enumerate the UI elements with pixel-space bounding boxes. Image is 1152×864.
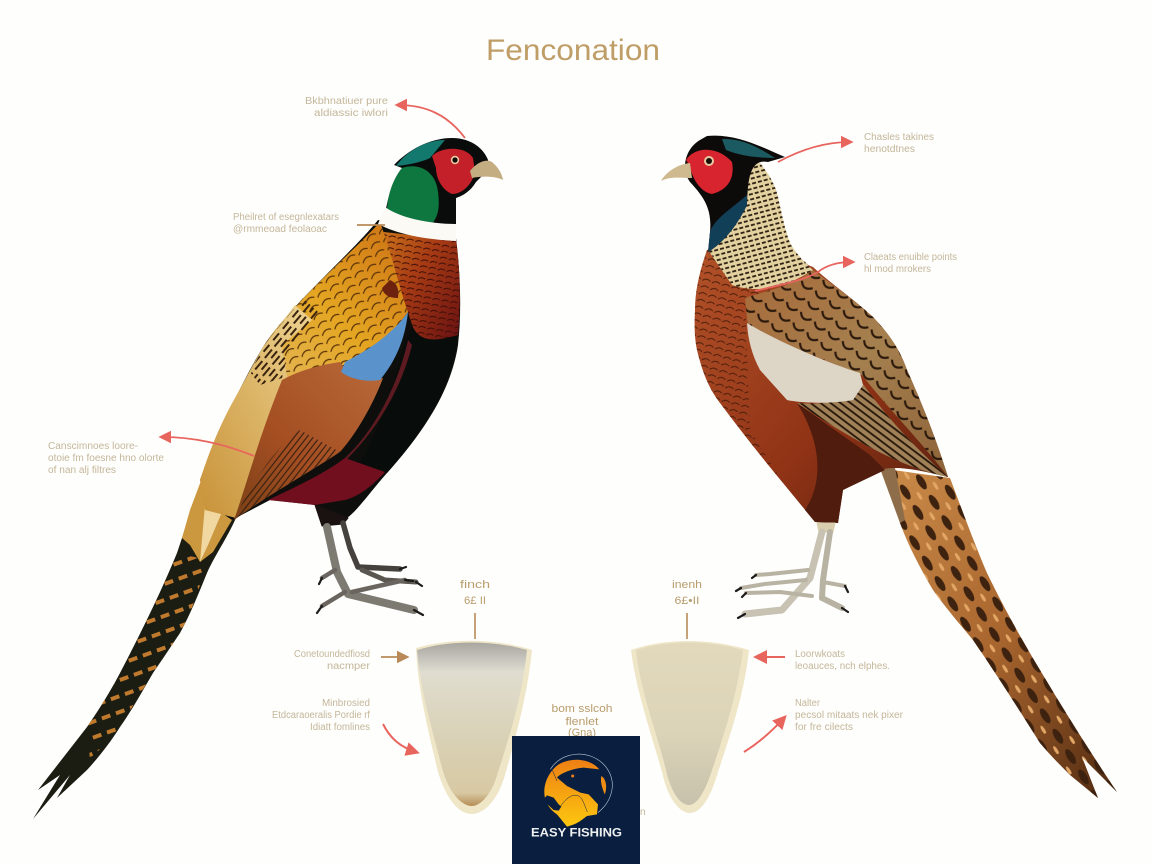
callout: lower left upper	[294, 649, 406, 672]
arrow: crown pointer	[398, 105, 465, 138]
callout: right top: henotdtnes	[864, 144, 915, 155]
callout: left wing: Canscimnoes loore-	[48, 441, 138, 452]
dark red belly	[268, 458, 385, 505]
arrow: red curved pointer	[744, 718, 784, 752]
callout: lower left lower: Etdcaraoeralis Pordie rf	[272, 710, 370, 721]
female white patch	[747, 323, 863, 403]
female lower wing stripes	[797, 380, 948, 477]
callout: left collar: Pheilret of esegnlexatars	[233, 212, 339, 223]
male red face	[432, 149, 475, 194]
female tail	[878, 463, 1117, 798]
arrow: wing pointer	[162, 437, 254, 456]
callout: right neck: hl mod mrokers	[864, 264, 931, 275]
callout: left top	[305, 96, 465, 138]
diagram: left tongue specimen	[416, 641, 532, 814]
logo: Easy Fishing	[512, 736, 640, 864]
label: left scale: 6£ II	[464, 595, 486, 607]
male tail	[33, 467, 240, 819]
callout: right top	[778, 132, 934, 162]
illustration: male pheasant	[33, 138, 503, 819]
callout: center label	[552, 703, 646, 818]
male body	[200, 220, 460, 520]
male neck and head	[378, 138, 503, 241]
icon: fisher and fish badge	[543, 754, 612, 827]
callout: lower left lower: Minbrosied	[322, 698, 370, 709]
illustration: female pheasant	[661, 136, 1117, 798]
callout: left top: aldiassic iwlori	[314, 108, 388, 119]
wing	[234, 362, 383, 520]
callout: center label: (Gna)	[568, 727, 596, 739]
arrow: red curved pointer	[383, 724, 416, 752]
callout: center label: bom sslcoh	[552, 703, 612, 715]
arrow: crest pointer	[778, 142, 850, 162]
female beak	[661, 163, 692, 181]
arrow: neck pointer	[755, 262, 852, 291]
callout: lower right lower: pecsol mitaats nek pixer	[795, 710, 904, 721]
female upper wing	[745, 270, 948, 477]
breast	[360, 232, 460, 350]
callout: lower right lower: for fre cilects	[795, 722, 853, 733]
female red face	[686, 150, 733, 194]
callout: left wing	[48, 437, 254, 476]
callout: center label: n	[640, 807, 646, 818]
female neck and head	[661, 136, 785, 252]
callout: right neck	[755, 252, 957, 291]
callout: lower left lower: Idiatt fomlines	[310, 722, 370, 733]
mantle feathers	[245, 222, 408, 392]
black belly	[355, 325, 458, 473]
label: right scale	[672, 579, 702, 639]
callout: lower left upper: Conetoundedfiosd	[294, 649, 370, 660]
label: left scale: finch	[460, 579, 490, 591]
callout: right top: Chasles takines	[864, 132, 934, 143]
blue patch	[341, 312, 408, 381]
callout: lower right upper	[757, 649, 890, 672]
callout: left collar	[233, 212, 385, 235]
callout: left wing: of nan alj filtres	[48, 465, 116, 476]
male beak	[470, 161, 503, 180]
callout: lower left upper: nacmper	[327, 661, 371, 672]
logo wordmark: EASY FISHING	[531, 828, 622, 840]
callout: lower right lower: Nalter	[795, 698, 821, 709]
callout: left wing: otoie fm foesne hno olorte	[48, 453, 164, 464]
arrow: red pointer	[757, 656, 785, 658]
callout: lower right upper: Loorwkoats	[795, 649, 845, 660]
diagram: right tongue specimen	[631, 641, 749, 813]
rump	[200, 305, 312, 518]
label: right scale: 6£•II	[674, 595, 700, 607]
callout: left top: Bkbhnatiuer pure	[305, 96, 388, 107]
arrow: collar pointer	[357, 224, 385, 226]
callout: lower right upper: leoauces, nch elphes.	[795, 661, 890, 672]
male legs and foot	[315, 505, 423, 615]
label: right scale: inenh	[672, 579, 702, 591]
arrow: tan pointer	[381, 656, 406, 658]
female dark rear feathers	[797, 403, 885, 523]
callout: right neck: Claeats enuible points	[864, 252, 957, 263]
female legs and foot	[736, 523, 848, 618]
callout: lower right lower	[744, 698, 904, 752]
female speckled neck	[708, 163, 813, 289]
male white collar	[378, 207, 456, 241]
label: left scale	[460, 579, 490, 639]
female body	[695, 163, 948, 523]
callout: left collar: @rmmeoad feolaoac	[233, 224, 327, 235]
callout: center label: flenlet	[566, 716, 598, 728]
title: Fenconation	[486, 34, 660, 67]
callout: lower left lower	[272, 698, 416, 752]
